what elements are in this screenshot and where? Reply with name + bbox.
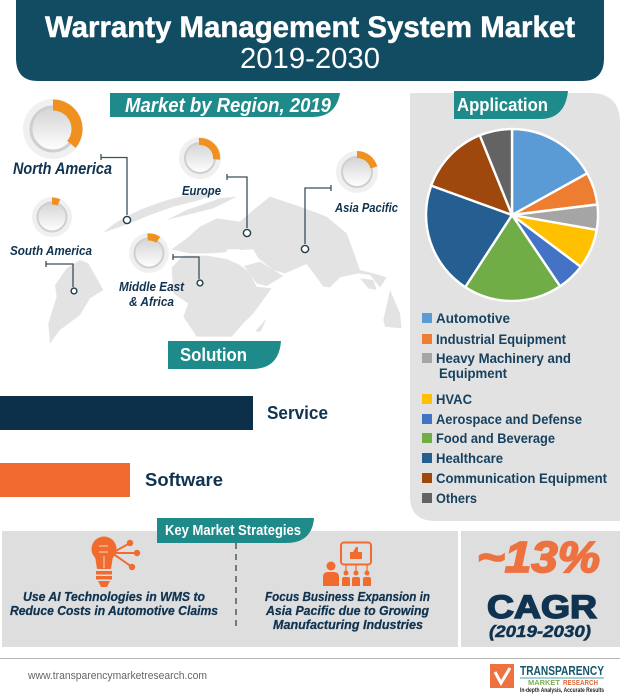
label: North America: North America	[13, 159, 112, 178]
leader: South America	[46, 261, 77, 294]
bar: software: Software	[145, 470, 223, 490]
leader: Middle East and Africa	[173, 254, 203, 286]
panel: CAGR: ~13%	[477, 533, 600, 582]
text: Asia Pacific strategy	[265, 589, 430, 632]
label: South America: South America	[10, 243, 92, 258]
world map	[48, 192, 402, 343]
legend: application: Healthcare	[436, 450, 503, 466]
legend: application: Food and Beverage	[436, 430, 555, 446]
icon: AI light bulb	[92, 536, 140, 587]
logo: Transparency Market Research	[490, 663, 605, 694]
legend: application: Others	[436, 490, 477, 506]
heading: solution	[168, 341, 281, 369]
legend: application: Communication Equipment	[436, 470, 607, 486]
bar: service: Service	[267, 403, 328, 423]
panel: application	[410, 91, 620, 521]
website url: www.transparencymarketresearch.com	[27, 670, 207, 682]
text: Asia Pacific strategy: Asia Pacific due to Growing	[265, 603, 429, 618]
logo: Transparency Market Research: In-depth Analysis, Accurate Results	[520, 688, 605, 694]
donut: North America	[23, 99, 83, 159]
panel: CAGR	[461, 531, 620, 647]
heading: application	[454, 91, 568, 119]
donut: Middle East and Africa	[129, 233, 169, 273]
logo: Transparency Market Research: MARKET	[528, 678, 560, 687]
title banner	[16, 0, 604, 81]
icon: audience and presentation	[323, 542, 371, 586]
panel: key market strategies	[2, 518, 458, 647]
legend: application: Automotive	[436, 310, 510, 326]
text: Asia Pacific strategy: Focus Business Expansion in	[265, 589, 430, 604]
heading: key market strategies	[157, 518, 314, 543]
legend: application	[422, 310, 607, 506]
title banner: Warranty Management System Market	[45, 11, 575, 44]
legend: application: Aerospace and Defense	[436, 411, 582, 427]
pie chart: application share	[426, 129, 598, 301]
heading: market by region: Market by Region, 2019	[125, 95, 332, 117]
leader: Asia Pacific	[301, 185, 331, 253]
heading: solution: Solution	[180, 345, 247, 365]
donut: Europe	[179, 137, 221, 179]
leader: Europe	[227, 174, 251, 237]
logo: Transparency Market Research: RESEARCH	[563, 678, 598, 687]
donut: Asia Pacific	[336, 151, 378, 193]
panel: CAGR: (2019-2030)	[489, 622, 591, 641]
divider	[235, 543, 237, 628]
panel: CAGR: CAGR	[487, 589, 597, 625]
text: AI strategy: Reduce Costs in Automotive Claims	[10, 603, 218, 618]
legend: application: HVAC	[436, 391, 472, 407]
legend: application: Heavy Machinery and	[436, 350, 571, 366]
donut: South America	[32, 197, 72, 237]
label: Europe: Europe	[182, 183, 221, 198]
text: AI strategy	[10, 589, 218, 618]
label: Middle East and Africa	[119, 279, 185, 309]
heading: application: Application	[457, 95, 548, 115]
label: Middle East and Africa: Middle East	[119, 279, 185, 294]
heading: key market strategies: Key Market Strategies	[165, 522, 301, 539]
label: Middle East and Africa: & Africa	[129, 294, 174, 309]
leader: North America	[101, 154, 131, 224]
text: Asia Pacific strategy: Manufacturing Industries	[273, 617, 423, 632]
title banner: 2019-2030	[240, 43, 380, 75]
text: AI strategy: Use AI Technologies in WMS to	[23, 589, 205, 604]
legend: application: Industrial Equipment	[436, 331, 566, 347]
legend: application: Equipment	[439, 365, 507, 381]
footer rule	[0, 658, 620, 660]
bar: service	[0, 396, 328, 430]
bar: software	[0, 463, 223, 497]
label: Asia Pacific: Asia Pacific	[334, 200, 399, 215]
